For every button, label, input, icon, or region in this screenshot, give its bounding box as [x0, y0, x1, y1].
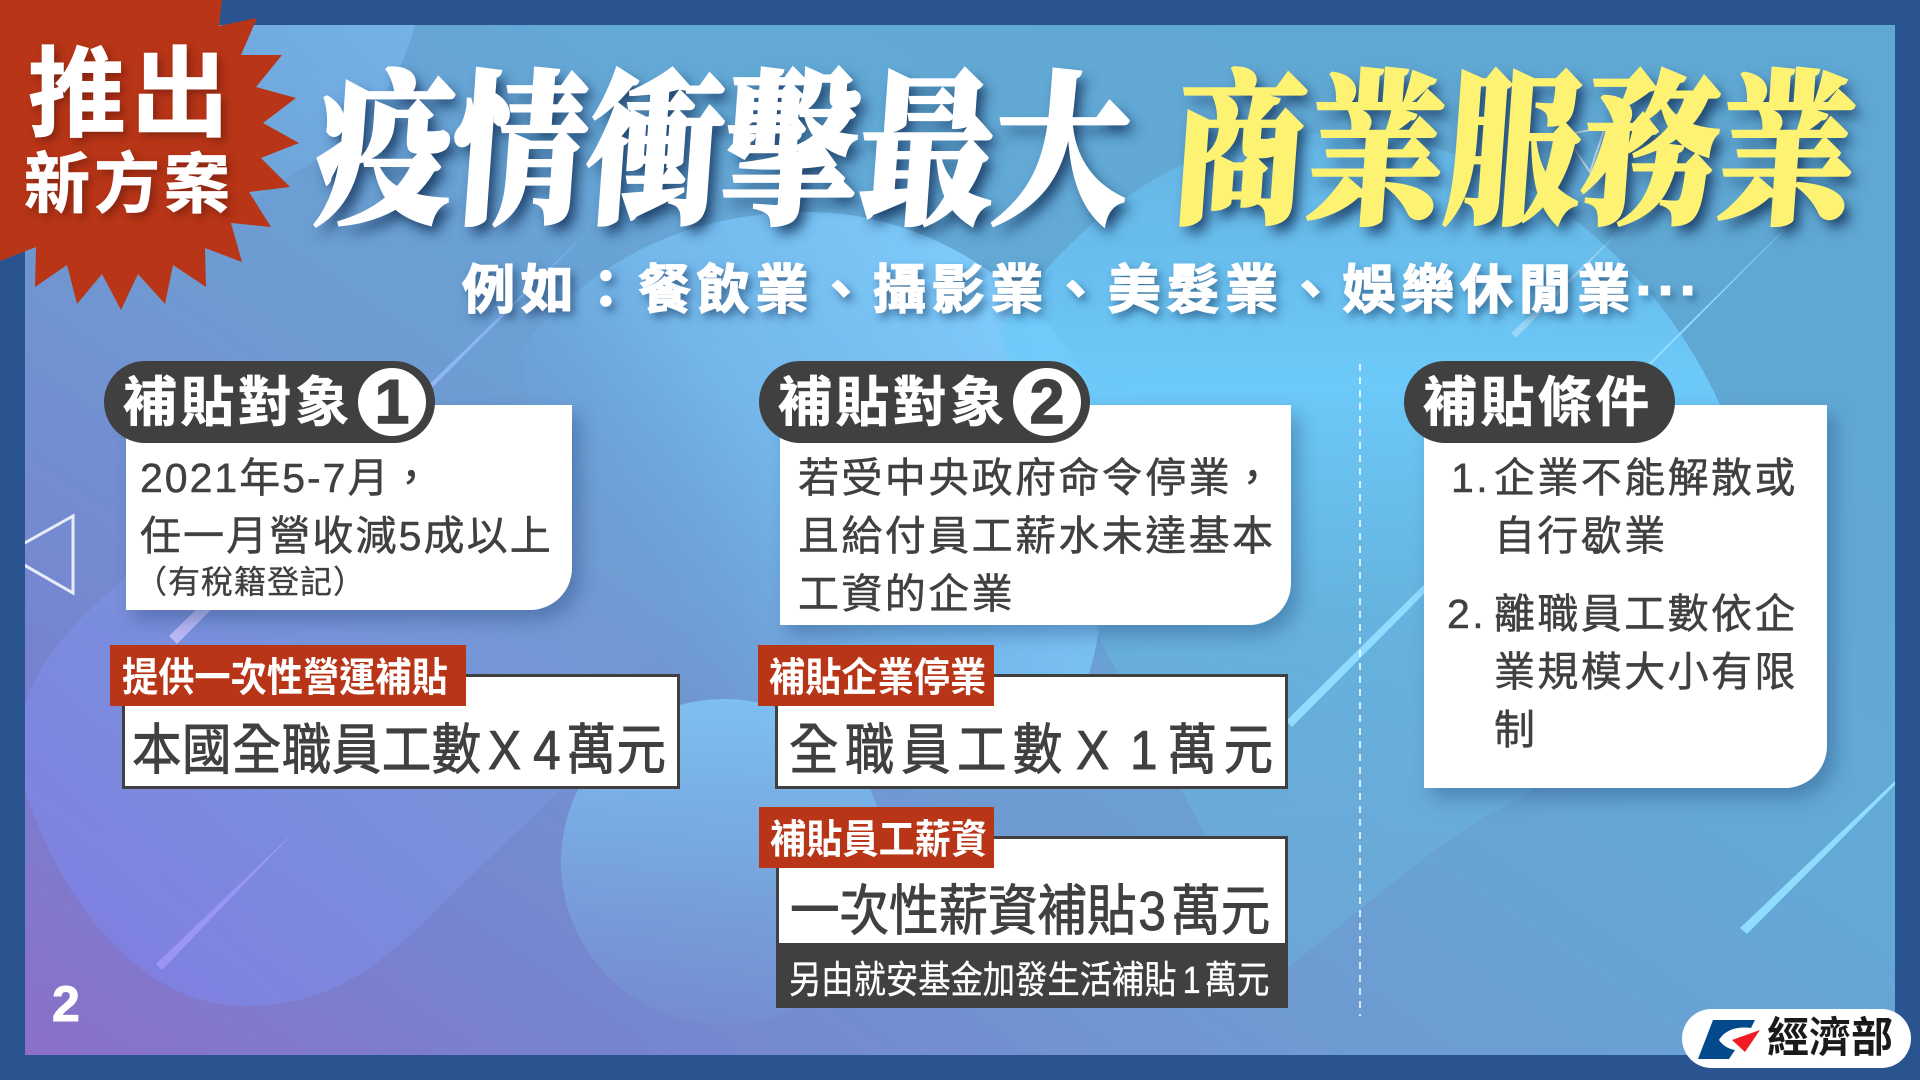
- red tag: one-off: 提供一次性營運補貼: [122, 656, 448, 700]
- red tag: business closure: [758, 645, 994, 706]
- amount text: 一次性薪資補貼3萬元: [790, 880, 1270, 942]
- lines: 若受中央政府命令停業，: [798, 455, 1275, 501]
- band text: 另由就安基金加發生活補貼1萬元: [789, 960, 1269, 1002]
- badge subheading: 新方案: [24, 147, 234, 221]
- item 2: 業規模大小有限: [1494, 649, 1798, 695]
- pill text: 補貼對象: [123, 373, 353, 433]
- badge heading: 推出: [28, 39, 234, 149]
- logo text: 經濟部: [1767, 1014, 1893, 1061]
- pill heading: conditions: [1404, 361, 1675, 443]
- red tag: one-off: [110, 645, 466, 706]
- number 1: 1: [375, 368, 409, 437]
- badge: starburst: [0, 0, 299, 310]
- item 2: 2.: [1447, 591, 1486, 637]
- result box 1: [122, 674, 680, 789]
- panel: conditions: [1424, 405, 1827, 788]
- lines: 工資的企業: [798, 571, 1015, 617]
- result box 2: [775, 674, 1288, 789]
- amount text: 全職員工數X 1萬元: [789, 719, 1280, 781]
- item 2: 離職員工數依企: [1494, 591, 1798, 637]
- icon: ministry logo: [1698, 1020, 1760, 1059]
- divider: [1359, 364, 1361, 1016]
- note: （有稅籍登記）: [135, 564, 366, 600]
- logo pill: [1682, 1009, 1911, 1068]
- pill heading: target 2: [759, 361, 1090, 443]
- pill text: 補貼對象: [778, 373, 1008, 433]
- number 2: [1013, 368, 1081, 436]
- line 2: 任一月營收減5成以上: [140, 513, 553, 559]
- title: white: 疫情衝擊最大: [310, 20, 1139, 257]
- pill heading: target 1: [104, 361, 435, 443]
- item 1: 自行歇業: [1494, 513, 1668, 559]
- line 1: 2021年5-7月，: [140, 455, 433, 501]
- number 2: 2: [1030, 368, 1064, 437]
- subtitle: examples: 例如：餐飲業、攝影業、美髮業、娛樂休閒業···: [462, 261, 1702, 320]
- panel: target 2 text: [780, 405, 1291, 625]
- item 2: 制: [1494, 707, 1537, 753]
- pill text: 補貼條件: [1423, 373, 1653, 433]
- title: yellow: 商業服務業: [1165, 20, 1866, 257]
- item 2: [1447, 591, 1798, 753]
- item 1: 1.: [1451, 455, 1490, 501]
- lines: [798, 455, 1275, 617]
- red tag: wages: [759, 807, 994, 868]
- item 1: [1451, 455, 1798, 559]
- red tag: business closure: 補貼企業停業: [769, 656, 986, 700]
- panel: target 1 text: [126, 405, 572, 610]
- extra subsidy band: [776, 946, 1288, 1008]
- item 1: 企業不能解散或: [1494, 455, 1798, 501]
- result box 3: [776, 836, 1288, 946]
- red tag: wages: 補貼員工薪資: [770, 818, 987, 862]
- lines: 且給付員工薪水未達基本: [798, 513, 1275, 559]
- page number: 2: [52, 976, 80, 1032]
- number 1: [358, 368, 426, 436]
- amount text: 本國全職員工數X4萬元: [132, 719, 666, 781]
